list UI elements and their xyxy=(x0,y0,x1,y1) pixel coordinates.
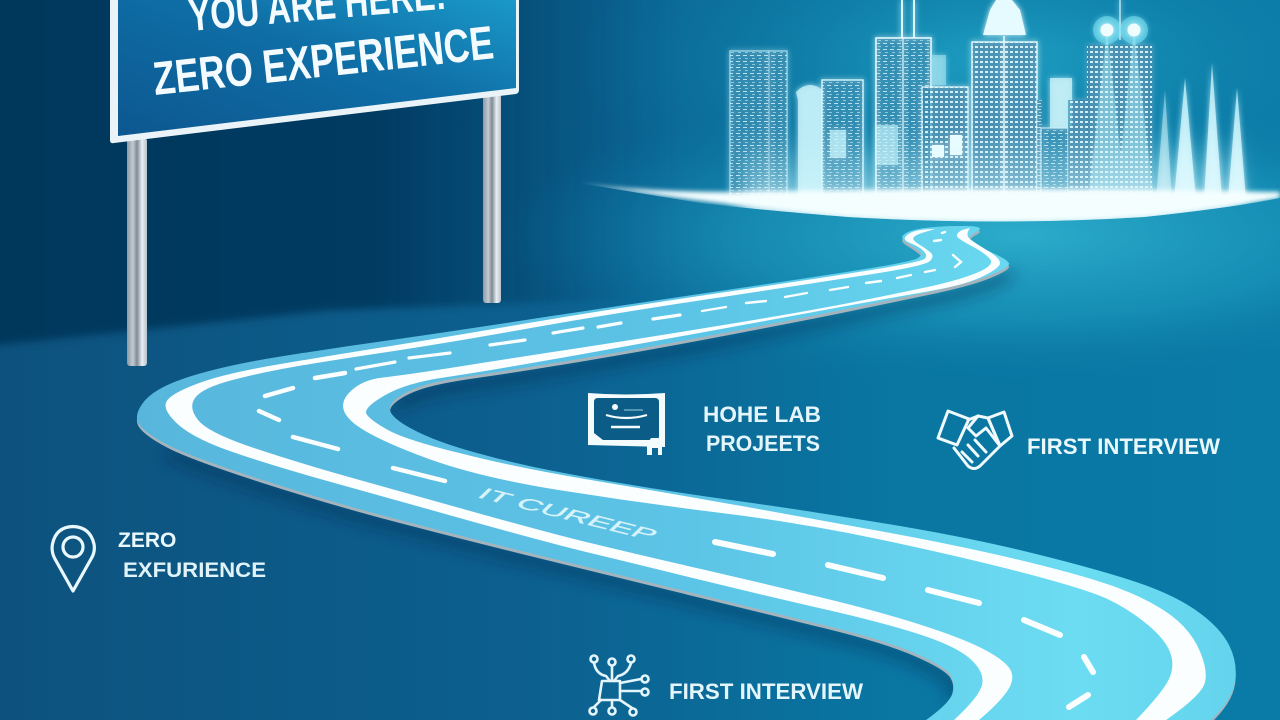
label: ZERO xyxy=(118,529,176,552)
road sign xyxy=(110,0,519,143)
tower: white column xyxy=(796,85,824,200)
road lettering: IT CUREEP xyxy=(473,485,663,544)
milestone: zero experience xyxy=(52,526,266,591)
road surface xyxy=(137,226,1236,720)
sign posts xyxy=(127,90,501,366)
road outer white line xyxy=(166,229,1012,720)
tower: block three xyxy=(822,80,863,200)
road centre dashes xyxy=(259,232,1093,707)
label: HOHE LAB xyxy=(703,402,821,427)
road shadow xyxy=(168,272,1009,701)
icon: certificate xyxy=(588,393,665,455)
tower: left block xyxy=(730,51,787,201)
road rim xyxy=(137,229,1236,720)
road inner white line xyxy=(343,228,1206,720)
icon: location pin xyxy=(52,526,94,591)
tower: central tower with spire xyxy=(972,0,1037,200)
tower: glowing twin-light tower xyxy=(1087,0,1154,200)
tower: right low blocks xyxy=(1037,78,1088,200)
sign panel xyxy=(118,0,516,136)
tower: low block xyxy=(922,87,968,200)
label: FIRST INTERVIEW xyxy=(669,679,863,704)
sign frame xyxy=(110,0,519,143)
milestone: zero experience: EXFURIENCE xyxy=(123,559,266,582)
icon: circuit chip xyxy=(590,656,648,716)
horizon glow xyxy=(585,139,1280,222)
tower: antenna tower xyxy=(876,0,946,200)
icon: handshake xyxy=(938,411,1012,468)
milestone: first interview handshake xyxy=(938,411,1220,468)
milestone: first interview circuit xyxy=(590,656,863,716)
sign text line two: ZERO EXPERIENCE xyxy=(150,15,496,105)
label: FIRST INTERVIEW xyxy=(1027,434,1220,459)
milestone: home lab projects: PROJEETS xyxy=(706,431,820,456)
spires xyxy=(1156,63,1246,200)
city skyline xyxy=(730,0,1246,201)
milestone: home lab projects xyxy=(588,393,821,456)
road xyxy=(137,226,1236,720)
